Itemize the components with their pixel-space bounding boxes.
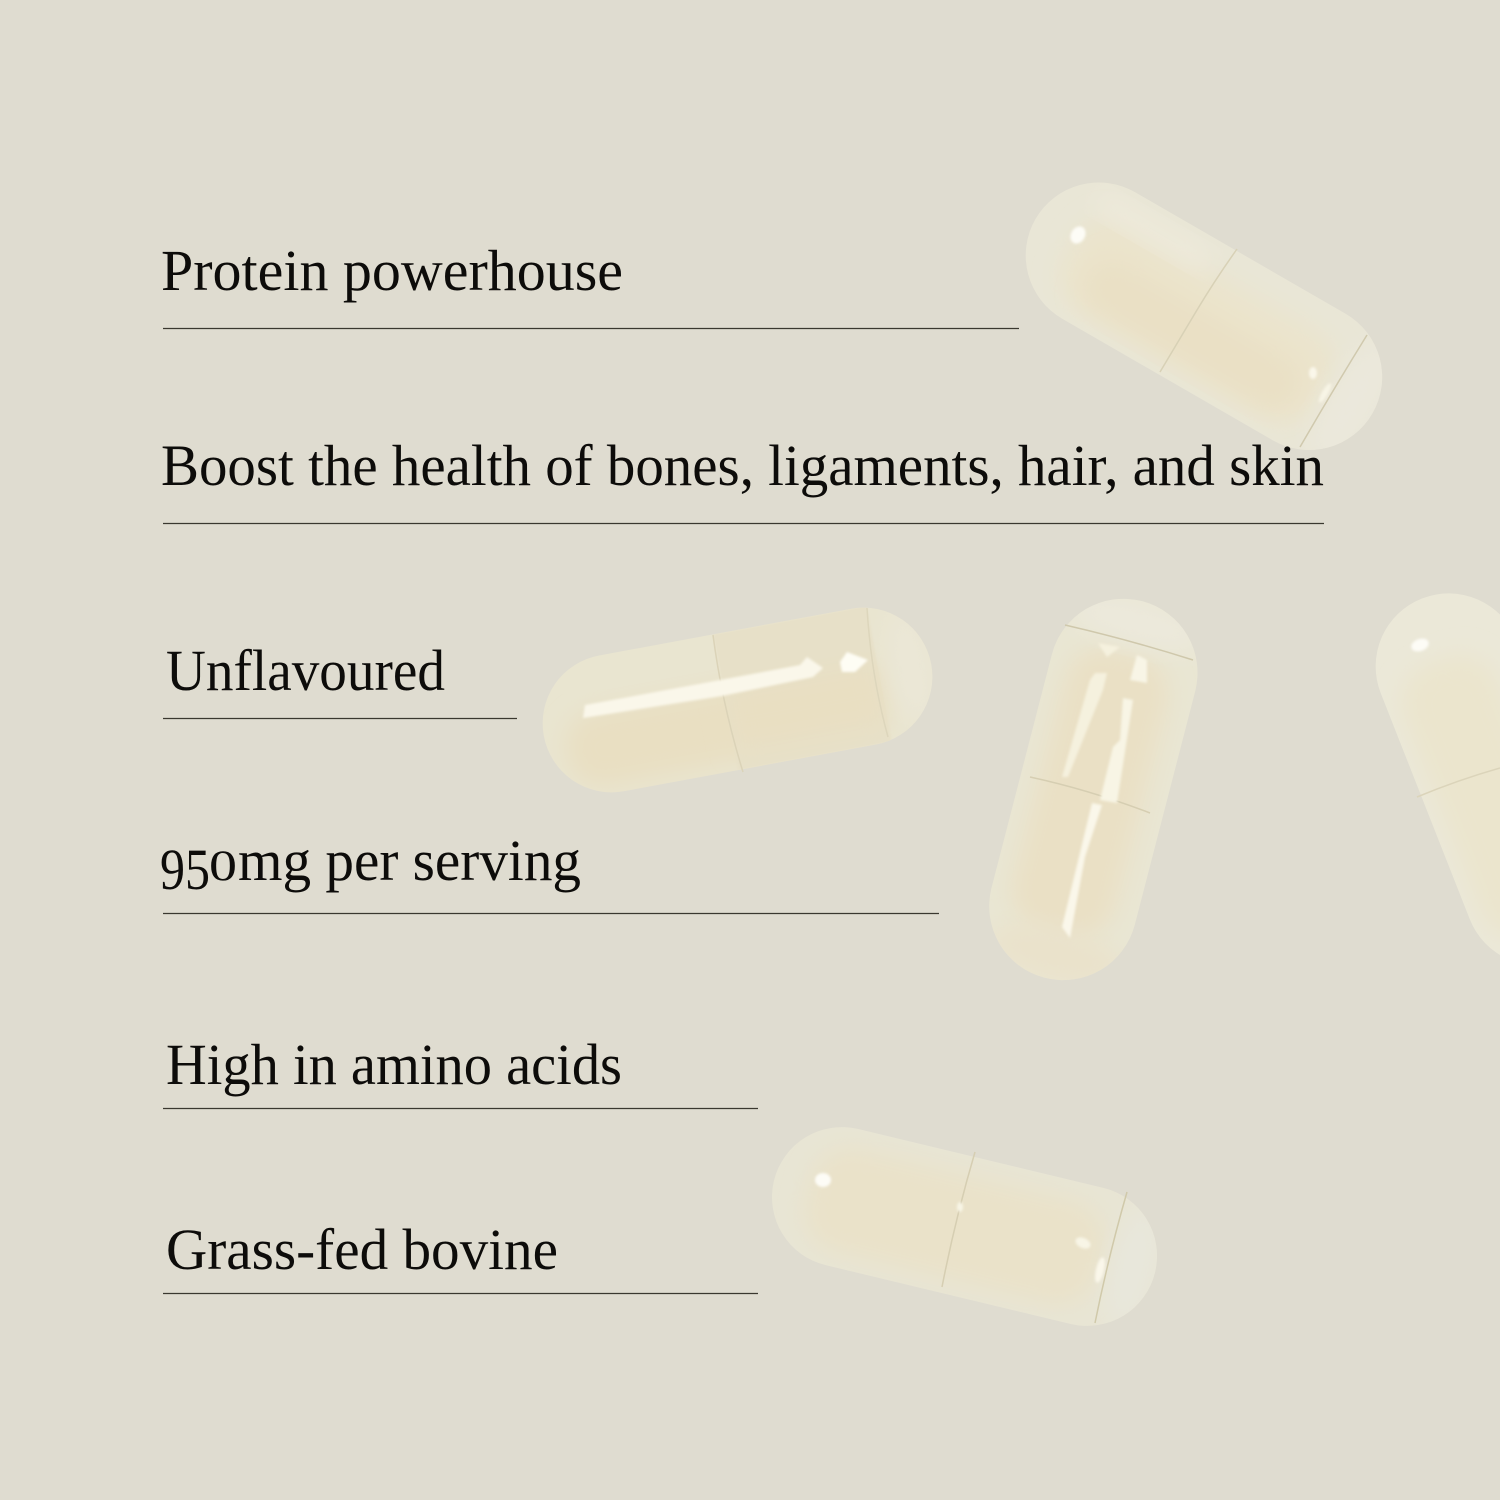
- row: High in amino acids: High in amino acids: [166, 1032, 622, 1097]
- row: Grass-fed bovine: Grass-fed bovine: [166, 1217, 558, 1282]
- row: Boost the health: Boost the health of bones, ligaments, hair, and skin: [161, 433, 1324, 498]
- row: 950mg per serving: 0: [209, 843, 237, 890]
- capsule: centre right: [990, 599, 1198, 980]
- capsule: bottom: [772, 1128, 1157, 1326]
- capsule: cut off at right edge: [1376, 594, 1500, 954]
- row: 950mg per serving: mg per serving: [238, 828, 581, 893]
- row: 950mg per serving: [160, 828, 939, 914]
- row: 950mg per serving: 95: [160, 837, 210, 902]
- infographic canvas: [162, 182, 1500, 1326]
- row: Unflavoured: Unflavoured: [166, 638, 445, 703]
- capsule: top right: [1026, 182, 1382, 450]
- row: Protein powerhouse: Protein powerhouse: [161, 238, 623, 303]
- capsule: centre left: [543, 608, 932, 792]
